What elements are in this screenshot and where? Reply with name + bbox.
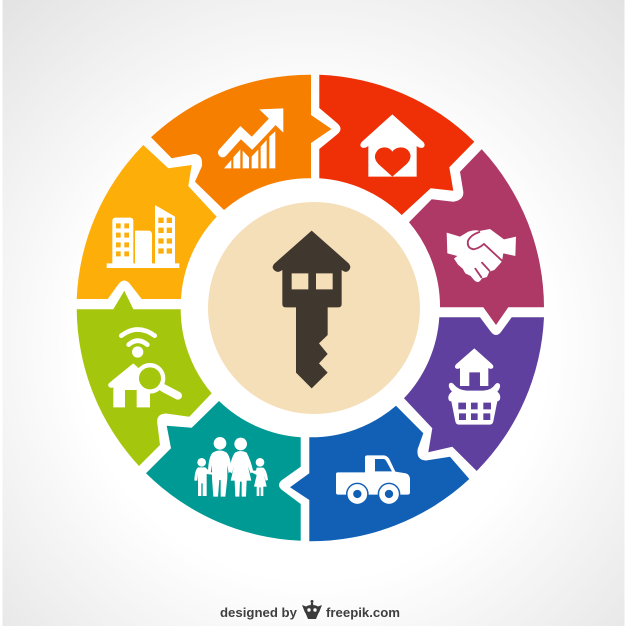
ground and towers	[107, 205, 179, 268]
icon: house key	[273, 231, 350, 388]
daughter	[252, 458, 268, 496]
icon: house in basket	[448, 348, 500, 425]
fingers	[468, 232, 502, 277]
credit	[220, 600, 400, 620]
segment: purple	[404, 317, 544, 471]
basket	[448, 383, 500, 425]
icon: freepik crown logo	[302, 600, 322, 619]
segment: red	[319, 75, 474, 215]
mother	[229, 438, 253, 497]
magnifier handle	[163, 388, 178, 396]
house	[360, 114, 425, 177]
icon: handshake	[447, 229, 516, 282]
icon: growth chart	[223, 108, 283, 168]
son	[194, 458, 213, 496]
front wheel	[350, 487, 364, 501]
segment: orange	[151, 75, 332, 210]
icon: heart house	[360, 114, 425, 177]
wheel	[77, 75, 544, 541]
segment: blue	[290, 406, 469, 541]
icon: pickup truck	[336, 455, 410, 505]
credit text: freepik.com: freepik.com	[326, 605, 400, 620]
icon: family	[194, 437, 268, 497]
heart	[375, 147, 411, 177]
segment: yellow	[77, 145, 217, 299]
wifi dot	[132, 346, 143, 358]
rear wheel	[382, 487, 396, 501]
hands	[447, 229, 516, 282]
wifi arcs	[121, 329, 155, 345]
house	[108, 363, 150, 407]
center circle	[208, 202, 420, 414]
segment: green	[77, 291, 212, 466]
house	[455, 348, 493, 386]
segment: teal	[146, 401, 301, 541]
credit text: designed by: designed by	[220, 605, 298, 620]
truck body	[336, 455, 410, 495]
icon: buildings	[107, 205, 179, 268]
father	[208, 437, 231, 497]
arrow head	[259, 108, 283, 133]
icon: house search with wifi	[108, 329, 178, 407]
chart arrow	[223, 121, 273, 153]
magnifier	[137, 365, 163, 391]
wheel wells	[346, 483, 369, 505]
chart bars	[224, 131, 275, 168]
segment: maroon	[409, 149, 544, 325]
